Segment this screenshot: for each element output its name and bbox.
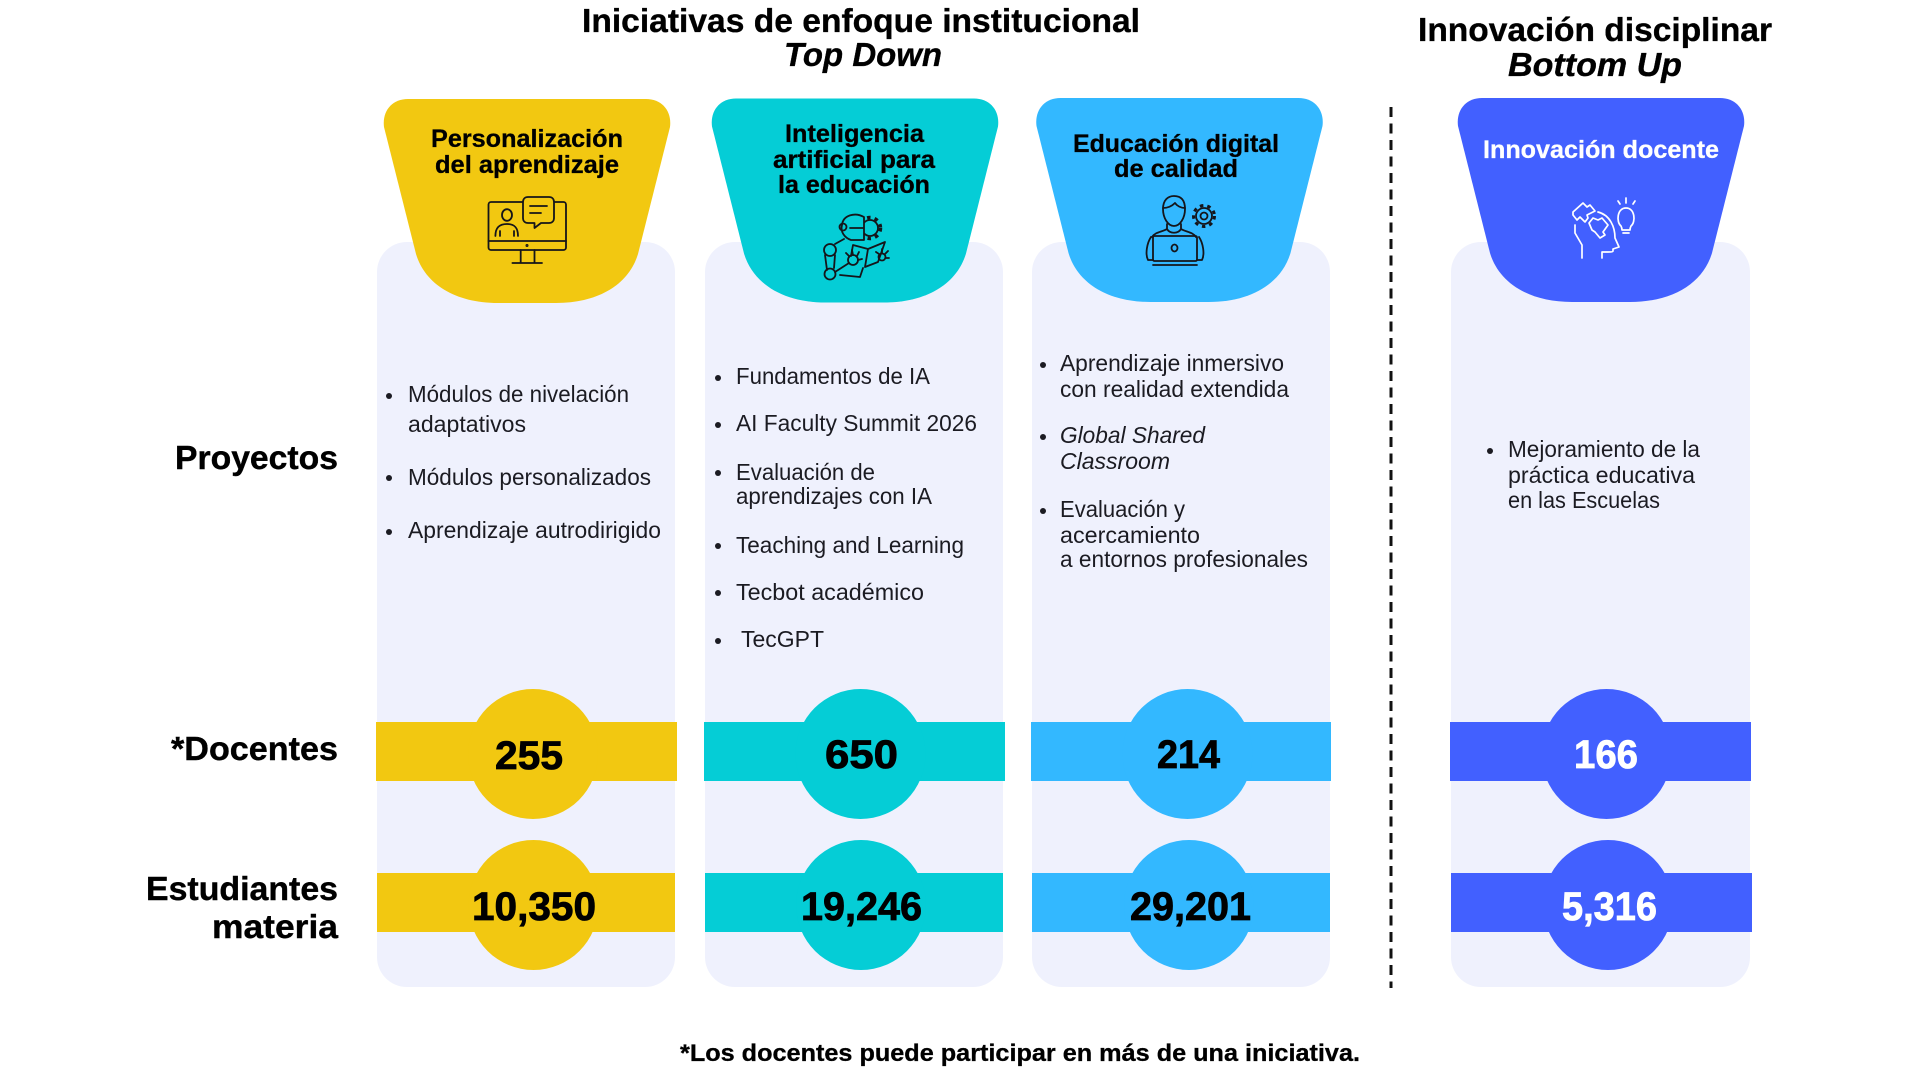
estudiantes badge bbox=[705, 840, 1003, 970]
footnote: *Los docentes puede participar en más de una iniciativa. bbox=[680, 1040, 1360, 1067]
project list: adaptativos bbox=[408, 411, 526, 437]
row label: Estudiantes materia: Estudiantes bbox=[146, 870, 338, 907]
column background bbox=[1451, 242, 1750, 987]
shield title: artificial para bbox=[773, 146, 936, 174]
project list: AI Faculty Summit 2026 bbox=[736, 410, 977, 436]
project list: Classroom bbox=[1060, 448, 1170, 474]
docentes badge bbox=[1031, 689, 1331, 819]
shield title: Personalización bbox=[431, 125, 623, 153]
shield title bbox=[431, 125, 623, 179]
docentes badge bbox=[376, 689, 677, 819]
icon: robot reading a book with gear bbox=[824, 215, 889, 280]
shield header bbox=[712, 98, 998, 302]
shield title: Innovación docente bbox=[1483, 136, 1719, 164]
column background bbox=[1032, 242, 1330, 987]
panel: Innovación docente bbox=[1450, 98, 1752, 987]
icon: person with laptop and gear bbox=[1147, 196, 1214, 265]
estudiantes badge bbox=[1451, 840, 1752, 970]
project list bbox=[386, 381, 661, 543]
project list: Teaching and Learning bbox=[736, 532, 964, 558]
docentes badge: 166 bbox=[1574, 733, 1638, 777]
project list: Tecbot académico bbox=[736, 579, 924, 605]
estudiantes badge bbox=[1032, 840, 1330, 970]
row label: Docentes: *Docentes bbox=[171, 730, 338, 767]
project list: Mejoramiento de la bbox=[1508, 436, 1700, 462]
project list: a entornos profesionales bbox=[1060, 546, 1308, 572]
project list: Aprendizaje inmersivo bbox=[1060, 350, 1284, 376]
project list: en las Escuelas bbox=[1508, 487, 1660, 513]
panel: Personalización del aprendizaje bbox=[376, 99, 677, 987]
shield title: Inteligencia bbox=[785, 120, 925, 148]
row label: Estudiantes materia: materia bbox=[212, 908, 339, 945]
column background bbox=[705, 242, 1003, 987]
docentes badge: 650 bbox=[825, 733, 898, 777]
shield title: del aprendizaje bbox=[435, 151, 619, 179]
heading: bottom up innovation bbox=[1418, 11, 1772, 83]
project list bbox=[715, 363, 977, 652]
heading: top down initiatives: Iniciativas de enfoque institucional bbox=[582, 2, 1140, 39]
project list: con realidad extendida bbox=[1060, 376, 1289, 402]
shield header bbox=[1036, 98, 1323, 302]
project list bbox=[1040, 350, 1308, 572]
estudiantes badge: 5,316 bbox=[1562, 885, 1657, 929]
row label: Estudiantes materia bbox=[146, 870, 339, 945]
heading: bottom up innovation: Bottom Up bbox=[1508, 46, 1682, 83]
project list: TecGPT bbox=[741, 626, 824, 652]
divider: dashed separator between approaches bbox=[1390, 107, 1392, 988]
project list: Evaluación de bbox=[736, 459, 875, 485]
heading: top down initiatives: Top Down bbox=[784, 36, 942, 73]
estudiantes badge: 19,246 bbox=[801, 885, 922, 929]
docentes badge: 214 bbox=[1157, 733, 1221, 777]
panel: Educación digital de calidad bbox=[1031, 98, 1331, 987]
shield title: la educación bbox=[778, 171, 930, 199]
project list: Módulos personalizados bbox=[408, 464, 651, 490]
column background bbox=[377, 242, 675, 987]
estudiantes badge: 10,350 bbox=[472, 885, 596, 929]
project list: Aprendizaje autrodirigido bbox=[408, 517, 661, 543]
docentes badge bbox=[1450, 689, 1751, 819]
shield title: de calidad bbox=[1114, 155, 1238, 183]
heading: bottom up innovation: Innovación disciplinar bbox=[1418, 11, 1772, 48]
project list bbox=[1487, 436, 1700, 513]
docentes badge: 255 bbox=[495, 734, 563, 778]
project list: Global Shared bbox=[1060, 422, 1206, 448]
project list: aprendizajes con IA bbox=[736, 483, 933, 509]
project list: práctica educativa bbox=[1508, 462, 1695, 488]
shield header bbox=[1458, 98, 1744, 302]
icon: monitor with person and chat bubble bbox=[488, 197, 566, 263]
estudiantes badge bbox=[377, 840, 675, 970]
shield title bbox=[1073, 130, 1279, 183]
shield title bbox=[773, 120, 936, 199]
estudiantes badge: 29,201 bbox=[1130, 885, 1251, 929]
shield header bbox=[384, 99, 670, 303]
project list: Evaluación y bbox=[1060, 496, 1185, 522]
shield title: Educación digital bbox=[1073, 130, 1279, 158]
docentes badge bbox=[704, 689, 1005, 819]
project list: acercamiento bbox=[1060, 522, 1200, 548]
project list: Fundamentos de IA bbox=[736, 363, 931, 389]
project list: Módulos de nivelación bbox=[408, 381, 629, 407]
panel: Inteligencia artificial para la educación bbox=[704, 98, 1005, 987]
heading: top down initiatives bbox=[582, 2, 1140, 73]
row label: Proyectos: Proyectos bbox=[175, 439, 338, 476]
icon: head with puzzle pieces and light bulb bbox=[1573, 198, 1635, 258]
